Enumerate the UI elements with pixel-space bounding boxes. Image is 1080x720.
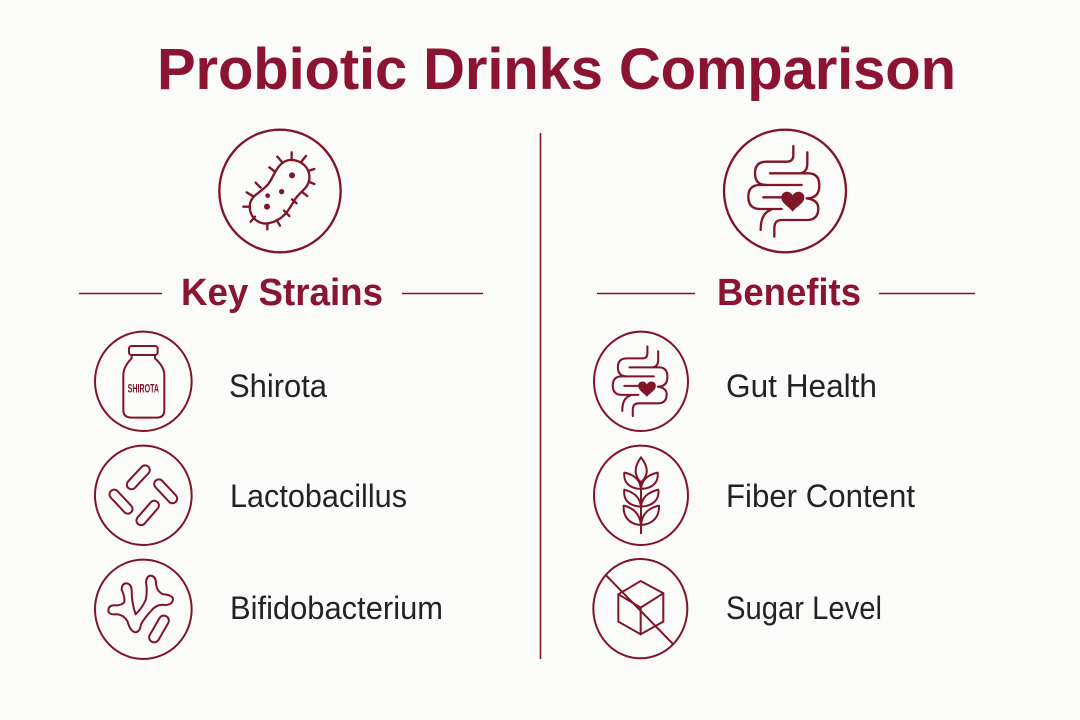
item: Lactobacillus: Lactobacillus [230, 478, 407, 514]
icon: bacterium [219, 130, 341, 252]
item: Gut Health [594, 332, 877, 431]
item: Fiber Content [594, 446, 915, 545]
item: Sugar Level [593, 559, 882, 658]
icon: bottle [95, 332, 192, 431]
icon: small gut with heart [594, 332, 688, 431]
panel: key strains [79, 130, 483, 659]
heading: key strains: Key Strains [181, 272, 383, 314]
item: Bifidobacterium: Bifidobacterium [230, 590, 443, 626]
icon: gut with heart [724, 130, 846, 252]
item: Shirota: Shirota [229, 368, 327, 404]
icon: branched bacteria [95, 560, 192, 659]
icon: crossed sugar cube [593, 559, 687, 658]
item: Bifidobacterium [95, 560, 443, 659]
icon: wheat [594, 446, 688, 545]
item: Gut Health: Gut Health [726, 368, 877, 404]
item: Shirota [95, 332, 327, 431]
item: Fiber Content: Fiber Content [726, 478, 915, 514]
icon: bottle: SHIROTA [128, 382, 159, 396]
heading: benefits: Benefits [717, 272, 861, 314]
item: Lactobacillus [95, 446, 407, 545]
title: Probiotic Drinks Comparison [157, 37, 956, 102]
item: Sugar Level: Sugar Level [726, 590, 882, 626]
icon: rod bacteria [95, 446, 192, 545]
panel: benefits [593, 130, 975, 658]
